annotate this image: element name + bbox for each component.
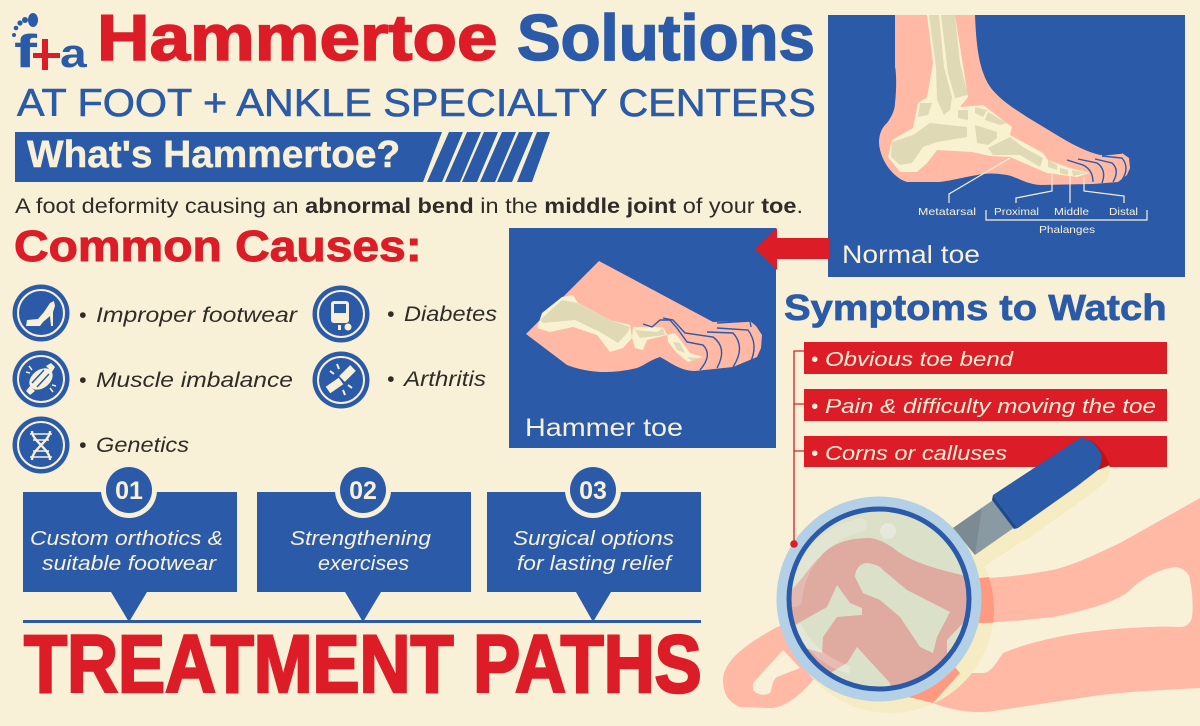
label: genetics: • — [79, 434, 86, 457]
icon: joint — [312, 352, 370, 408]
label: muscle imbalance: Muscle imbalance — [96, 369, 293, 392]
treatment card 02: Strengthening — [290, 528, 431, 550]
title: Hammertoe Solutions: Solutions — [517, 1, 815, 74]
heading: Common Causes: Common Causes: — [14, 221, 422, 271]
heading: Treatment Paths: TREATMENT PATHS — [24, 619, 702, 710]
icon: muscle — [12, 350, 70, 408]
panel: symptoms list: Pain & difficulty moving the toe — [825, 395, 1156, 418]
icon: DNA — [12, 416, 70, 474]
title: Hammertoe Solutions — [97, 1, 815, 74]
icon: glucose meter — [312, 286, 370, 342]
treatment card 03 — [487, 462, 701, 622]
logo: foot + ankle: a — [60, 32, 87, 76]
label: normal toe: Normal toe — [842, 241, 980, 269]
label: arthritis: • — [387, 368, 394, 391]
illustration: foot under magnifier — [723, 498, 1200, 712]
treatment card 01 — [23, 462, 237, 622]
logo: foot + ankle — [12, 13, 87, 77]
treatment card 03: Surgical options — [513, 528, 674, 550]
treatment card 02: 02 — [349, 477, 377, 505]
illustration: hammer toe foot — [526, 261, 762, 372]
label: muscle imbalance: • — [79, 369, 86, 392]
panel: symptoms list: • — [811, 348, 818, 371]
icon: high heel shoe — [12, 284, 70, 342]
label: diabetes: • — [387, 303, 394, 326]
illustration: normal foot — [879, 15, 1130, 185]
labels: toe bones: Middle — [1054, 206, 1089, 218]
label: diabetes: Diabetes — [404, 303, 498, 326]
treatment card 03: 03 — [579, 477, 607, 505]
panel: symptoms list: Obvious toe bend — [825, 348, 1014, 371]
treatment card 02 — [257, 462, 471, 622]
arrow: normal to hammer — [755, 228, 829, 270]
treatment card 01: suitable footwear — [42, 553, 218, 575]
labels: toe bones: Distal — [1109, 206, 1138, 218]
treatment card 01: Custom orthotics & — [30, 528, 223, 550]
labels: toe bones — [918, 158, 1147, 236]
heading: Symptoms to Watch: Symptoms to Watch — [784, 288, 1167, 329]
title: Hammertoe Solutions: Hammertoe — [97, 2, 497, 74]
labels: toe bones: Phalanges — [1039, 224, 1095, 236]
label: improper footwear: • — [79, 304, 86, 327]
treatment card 03: for lasting relief — [517, 553, 674, 575]
marker dot — [790, 540, 798, 548]
panel: symptoms list: Corns or calluses — [825, 442, 1007, 465]
panel: normal toe — [828, 15, 1185, 277]
banner: What's Hammertoe?: What's Hammertoe? — [27, 133, 400, 176]
treatment card 02: exercises — [318, 553, 409, 575]
definition text: A foot deformity causing an abnormal bend in the middle joint of your toe. — [15, 195, 803, 218]
panel: symptoms list — [794, 342, 1167, 544]
label: arthritis: Arthritis — [402, 368, 487, 391]
banner: What's Hammertoe? — [15, 132, 550, 182]
magnifier shadow — [808, 466, 1110, 713]
panel: hammer toe — [509, 228, 776, 448]
labels: toe bones: Proximal — [994, 206, 1039, 218]
label: genetics: Genetics — [96, 434, 190, 457]
icon: magnifying glass — [776, 438, 1110, 713]
label: improper footwear: Improper footwear — [96, 304, 298, 327]
logo: foot + ankle: f — [14, 26, 38, 77]
treatment card 01: 01 — [115, 477, 143, 505]
lens contents — [792, 518, 966, 686]
label: hammer toe: Hammer toe — [525, 414, 683, 442]
magnifier handle — [953, 438, 1110, 555]
labels: toe bones: Metatarsal — [918, 206, 976, 218]
panel: common causes list — [12, 284, 498, 474]
panel: symptoms list: • — [811, 442, 818, 465]
panel: symptoms list: • — [811, 395, 818, 418]
subtitle: AT FOOT + ANKLE SPECIALTY CENTERS — [17, 81, 816, 125]
